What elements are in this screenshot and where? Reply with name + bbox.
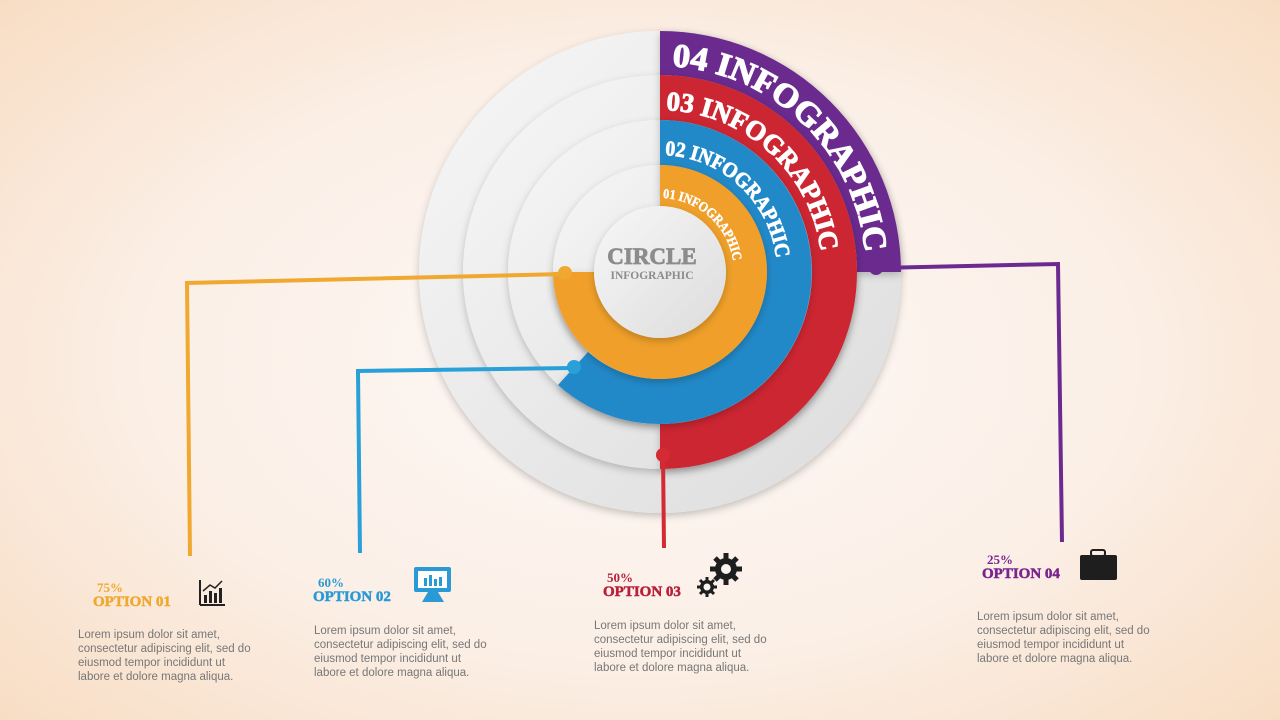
option 04 text: Lorem ipsum dolor sit amet, consectetur adipiscing elit, sed do eiusmod tempor incididunt ut labore et dolore magna aliqua. — [977, 611, 1150, 665]
option 01 label — [93, 580, 171, 610]
option 03 label — [603, 570, 681, 600]
center circle: INFOGRAPHIC — [610, 270, 694, 282]
gray base circles — [419, 31, 901, 513]
arc 01 orange: 01 INFOGRAPHIC — [663, 189, 742, 260]
arc 01 orange — [550, 165, 770, 386]
arc 03 red — [656, 75, 860, 476]
icon: chart — [200, 580, 225, 605]
center circle: CIRCLE — [607, 244, 697, 269]
icon: briefcase — [1080, 550, 1117, 580]
arc 02 blue — [557, 120, 815, 430]
option 04 label — [982, 552, 1060, 582]
option 02 label — [313, 575, 391, 605]
arc 03 red: 03 INFOGRAPHIC — [667, 92, 838, 250]
option 02 text: Lorem ipsum dolor sit amet, consectetur adipiscing elit, sed do eiusmod tempor incididunt ut labore et dolore magna aliqua. — [314, 625, 487, 679]
icon: monitor — [414, 567, 451, 602]
option 04 label: 25% — [987, 552, 1013, 567]
option 04 label: OPTION 04 — [982, 566, 1060, 582]
connector red — [656, 448, 670, 548]
option 03 label: OPTION 03 — [603, 584, 681, 600]
connector orange — [187, 266, 572, 556]
option 03 text: Lorem ipsum dolor sit amet, consectetur adipiscing elit, sed do eiusmod tempor incididunt ut labore et dolore magna aliqua. — [594, 620, 767, 674]
option 01 text: Lorem ipsum dolor sit amet, consectetur adipiscing elit, sed do eiusmod tempor incididunt ut labore et dolore magna aliqua. — [78, 629, 251, 683]
connector purple — [869, 261, 1062, 542]
center circle — [594, 206, 726, 338]
option 01 label: OPTION 01 — [93, 594, 171, 610]
option 03 label: 50% — [607, 570, 633, 585]
arc 04 purple: 04 INFOGRAPHIC — [674, 44, 886, 250]
icon: gears — [697, 553, 742, 597]
arc 02 blue: 02 INFOGRAPHIC — [666, 141, 790, 257]
option 02 label: 60% — [318, 575, 344, 590]
connector blue — [358, 360, 581, 553]
option 01 label: 75% — [97, 580, 123, 595]
option 02 label: OPTION 02 — [313, 589, 391, 605]
